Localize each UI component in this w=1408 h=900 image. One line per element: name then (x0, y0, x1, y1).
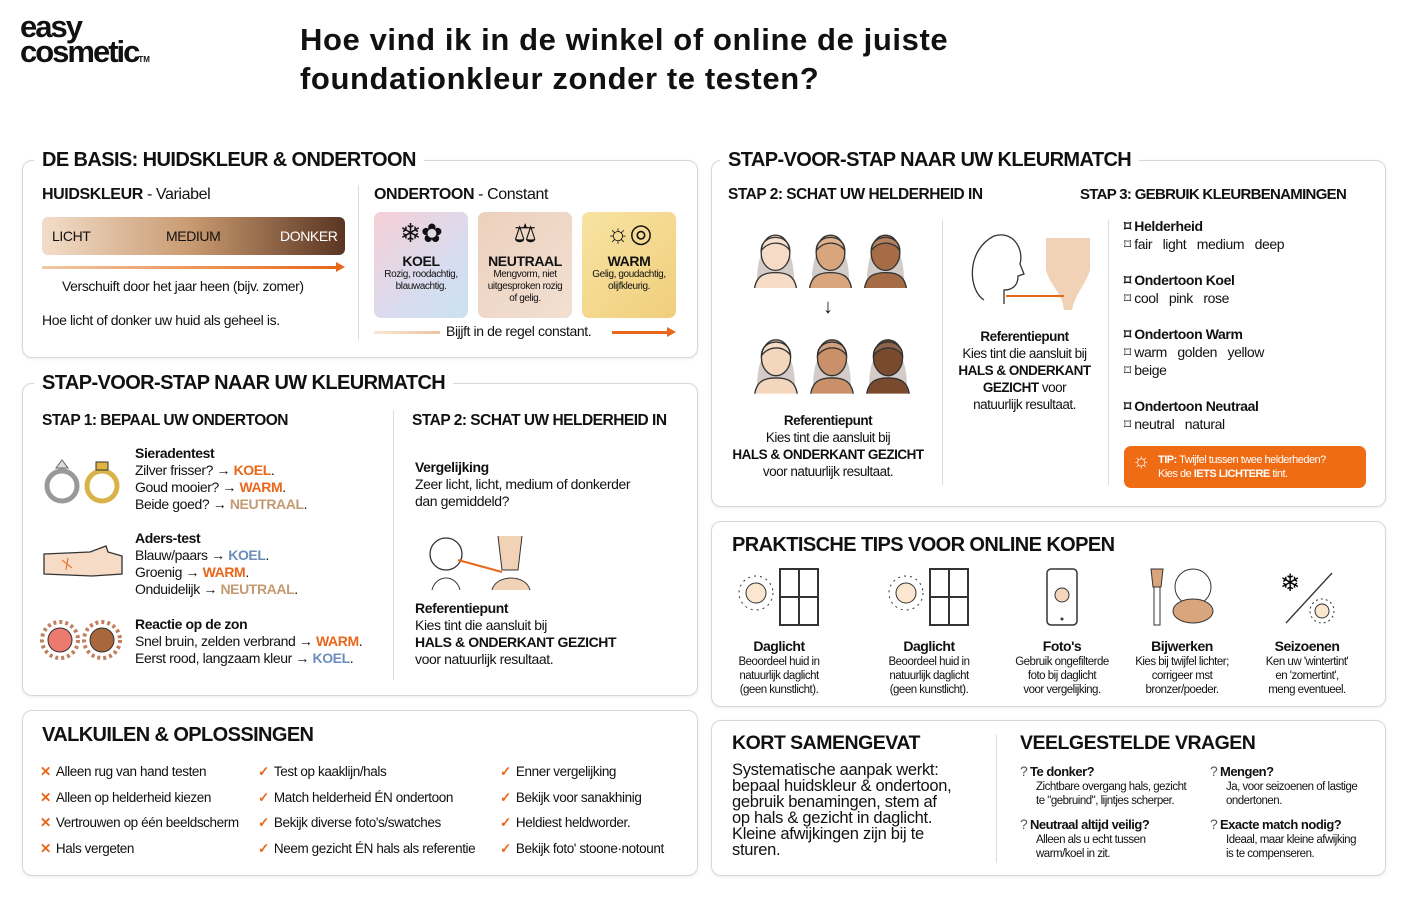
faces top row (754, 234, 907, 288)
icon: arm (43, 545, 123, 577)
tip daglicht 2: (geen kunstlicht). (890, 684, 968, 696)
faces bottom row (754, 339, 910, 394)
stap 3: ⌑ beige (1124, 362, 1167, 378)
stap 1: STAP 1: BEPAAL UW ONDERTOON (42, 412, 288, 429)
veelgestelde vragen: ? Exacte match nodig? (1210, 816, 1341, 832)
card warm: Gelig, goudachtig, (592, 269, 666, 280)
tip fotos: voor vergelijking. (1023, 684, 1101, 696)
tip callout: Kies de IETS LICHTERE tint. (1158, 468, 1288, 480)
heading: praktische tips: PRAKTISCHE TIPS VOOR ONLINE KOPEN (732, 534, 1114, 556)
card warm: WARM (608, 253, 650, 269)
heading: stap voor stap: STAP-VOOR-STAP NAAR UW KLEURMATCH (42, 372, 445, 394)
profile and neck icon (972, 234, 1090, 310)
kort samengevat: Systematische aanpak werkt: (732, 761, 938, 779)
veelgestelde vragen: Zichtbare overgang hals, gezicht (1036, 781, 1186, 793)
card neutraal (478, 212, 572, 318)
icon: sun reactions (40, 620, 122, 660)
tip daglicht 2 (888, 568, 970, 696)
stap 1: Groenig → WARM. (135, 564, 249, 580)
tip fotos: Foto's (1043, 638, 1081, 654)
tip seizoenen: ❄ (1280, 569, 1300, 597)
logo (20, 9, 150, 69)
stap 3: ⌑ Ondertoon Warm (1124, 326, 1242, 342)
kort samengevat: KORT SAMENGEVAT (732, 732, 920, 754)
huidskleur block (42, 186, 345, 328)
panel: de basis (22, 160, 698, 358)
card warm: ☼◎ (606, 218, 652, 248)
stap 2 left: dan gemiddeld? (415, 493, 509, 509)
stap 1: Snel bruin, zelden verbrand → WARM. (135, 633, 362, 649)
card neutraal: NEUTRAAL (488, 253, 562, 269)
tip callout: ☼ (1132, 450, 1150, 472)
stap 1: Goud mooier? → WARM. (135, 479, 286, 495)
list: valkuilen: ✓ Heldiest heldworder. (500, 815, 630, 830)
stap 2 left: Vergelijking (415, 459, 489, 475)
stap 2 left: STAP 2: SCHAT UW HELDERHEID IN (412, 412, 667, 429)
stap 3: ⌑ neutral natural (1124, 416, 1225, 432)
tip seizoenen: Ken uw 'wintertint' (1266, 656, 1348, 668)
kort samengevat: op hals & gezicht in daglicht. (732, 809, 932, 827)
kort samengevat: bepaal huidskleur & ondertoon, (732, 777, 951, 795)
icon: rings (44, 459, 120, 504)
stap 2 right (728, 186, 1091, 479)
tip seizoenen: en 'zomertint', (1275, 670, 1339, 682)
huidskleur block: Verschuift door het jaar heen (bijv. zomer) (62, 278, 304, 294)
stap 2 right: GEZICHT voor (983, 380, 1066, 395)
tip seizoenen: Seizoenen (1275, 638, 1339, 654)
list: valkuilen: ✕ Hals vergeten (40, 840, 134, 856)
stap 2 right: HALS & ONDERKANT GEZICHT (732, 447, 924, 462)
card warm (582, 212, 676, 318)
stap 1: Beide goed? → NEUTRAAL. (135, 496, 307, 512)
ondertoon block (374, 186, 676, 339)
stap 1: Onduidelijk → NEUTRAAL. (135, 581, 298, 597)
tips row (738, 568, 1348, 696)
stap 2 right: Kies tint die aansluit bij (962, 346, 1087, 361)
stap 2 right: natuurlijk resultaat. (973, 397, 1076, 412)
stap 2 left (412, 412, 667, 667)
tip callout (1124, 446, 1366, 488)
tip daglicht 2: Beoordeel huid in (888, 656, 970, 668)
stap 2 left: voor natuurlijk resultaat. (415, 651, 553, 667)
card neutraal: ⚖ (514, 218, 536, 248)
stap 2 left: Referentiepunt (415, 600, 508, 616)
list: valkuilen: ✓ Bekijk foto' stoone·notount (500, 840, 664, 856)
tip daglicht 1: Beoordeel huid in (738, 656, 820, 668)
list: valkuilen (40, 764, 664, 856)
stap 3: ⌑ warm golden yellow (1124, 344, 1264, 360)
stap 1: Reactie op de zon (135, 616, 247, 632)
panel: stap voor stap rechts (711, 160, 1386, 507)
stap 1: Zilver frisser? → KOEL. (135, 462, 274, 478)
card koel: ❄✿ (400, 218, 442, 248)
stap 1: Sieradentest (135, 445, 214, 461)
title (300, 22, 948, 96)
list: valkuilen: ✕ Alleen rug van hand testen (40, 764, 206, 779)
stap 3: ⌑ Ondertoon Koel (1124, 272, 1234, 288)
panel: praktische tips (711, 521, 1386, 707)
stap 2 right: Referentiepunt (980, 329, 1069, 344)
kort samengevat: sturen. (732, 841, 780, 859)
veelgestelde vragen: te "gebruind", lijntjes scherper. (1036, 795, 1174, 807)
stap 2 left: HALS & ONDERKANT GEZICHT (415, 634, 616, 650)
veelgestelde vragen: Ideaal, maar kleine afwijking (1226, 834, 1356, 846)
card koel (374, 212, 468, 318)
tip bijwerken: corrigeer mst (1152, 670, 1212, 682)
stap 2 right: STAP 2: SCHAT UW HELDERHEID IN (728, 186, 983, 203)
list: valkuilen: ✕ Alleen op helderheid kiezen (40, 790, 211, 804)
tip bijwerken: Bijwerken (1151, 638, 1213, 654)
card koel: Rozig, roodachtig, (384, 269, 458, 280)
card neutraal: Mengvorm, niet (493, 269, 557, 280)
logo: cosmeticTM (20, 34, 150, 69)
tip daglicht 1: natuurlijk daglicht (739, 670, 819, 682)
tip bijwerken: bronzer/poeder. (1145, 684, 1219, 696)
stap 2 right: HALS & ONDERKANT (958, 363, 1091, 378)
kort samengevat: Kleine afwijkingen zijn bij te (732, 825, 924, 843)
card koel: blauwachtig. (396, 281, 446, 292)
stap 3 (1080, 186, 1366, 488)
stap 3: ⌑ Helderheid (1124, 218, 1203, 234)
veelgestelde vragen: ? Neutraal altijd veilig? (1020, 816, 1149, 832)
tip fotos: foto bij daglicht (1028, 670, 1096, 682)
stap 3: STAP 3: GEBRUIK KLEURBENAMINGEN (1080, 186, 1346, 203)
card neutraal: uitgesproken rozig (488, 281, 562, 292)
stap 3: ⌑ fair light medium deep (1124, 236, 1284, 252)
tip seizoenen: meng eventueel. (1268, 684, 1346, 696)
heading: de basis: DE BASIS: HUIDSKLEUR & ONDERTOON (42, 149, 416, 171)
stap 1: Aders-test (135, 530, 200, 546)
icon: face and neck (429, 536, 530, 590)
gradient bar: MEDIUM (166, 228, 220, 244)
stap 2 right: Kies tint die aansluit bij (766, 430, 890, 445)
tip daglicht 2: natuurlijk daglicht (889, 670, 969, 682)
list: valkuilen: ✓ Enner vergelijking (500, 764, 616, 779)
stap 2 left: Kies tint die aansluit bij (415, 617, 547, 633)
tip daglicht 1: (geen kunstlicht). (740, 684, 818, 696)
gradient bar: LICHT (52, 228, 90, 244)
ondertoon block: ONDERTOON - Constant (374, 186, 548, 203)
tip daglicht 2: Daglicht (903, 638, 955, 654)
veelgestelde vragen: ? Te donker? (1020, 763, 1094, 779)
stap 1 (40, 412, 362, 666)
veelgestelde vragen: VEELGESTELDE VRAGEN (1020, 732, 1255, 754)
veelgestelde vragen: warm/koel in zit. (1036, 848, 1110, 860)
stap 2 right: Referentiepunt (784, 413, 872, 428)
panel: stap voor stap links (22, 383, 698, 696)
ondertoon block: Bijjft in de regel constant. (446, 323, 591, 339)
panel: valkuilen (22, 710, 698, 876)
veelgestelde vragen: ? Mengen? (1210, 763, 1274, 779)
veelgestelde vragen: ondertonen. (1226, 795, 1282, 807)
title: foundationkleur zonder te testen? (300, 61, 819, 96)
kort samengevat: gebruik benamingen, stem af (732, 793, 937, 811)
stap 2 right: voor natuurlijk resultaat. (763, 464, 893, 479)
huidskleur block: HUIDSKLEUR - Variabel (42, 186, 210, 203)
gradient bar: DONKER (280, 228, 338, 244)
gradient bar (42, 217, 345, 255)
tip daglicht 1: Daglicht (753, 638, 805, 654)
tip fotos (1015, 568, 1109, 696)
tip bijwerken (1135, 568, 1229, 696)
arrow (42, 266, 338, 269)
tip seizoenen (1266, 569, 1348, 696)
card koel: KOEL (402, 253, 440, 269)
list: valkuilen: ✓ Neem gezicht ÉN hals als referentie (258, 840, 475, 856)
list: valkuilen: ✓ Match helderheid ÉN ondertoon (258, 790, 453, 804)
panel: samenvatting en vragen (711, 720, 1386, 876)
heading: valkuilen: VALKUILEN & OPLOSSINGEN (42, 724, 313, 746)
list: valkuilen: ✓ Test op kaaklijn/hals (258, 764, 386, 779)
stap 3: ⌑ Ondertoon Neutraal (1124, 398, 1259, 414)
kort samengevat (732, 732, 951, 859)
logo: easy (20, 9, 81, 44)
list: valkuilen: ✓ Bekijk voor sanakhinig (500, 790, 641, 804)
stap 1: Blauw/paars → KOEL. (135, 547, 269, 563)
heading: stap voor stap rechts: STAP-VOOR-STAP NAAR UW KLEURMATCH (728, 149, 1131, 171)
veelgestelde vragen (1020, 732, 1358, 860)
card warm: olijfkleurig. (608, 281, 650, 292)
tip daglicht 1 (738, 568, 820, 696)
title: Hoe vind ik in de winkel of online de juiste (300, 22, 948, 57)
stap 2 left: Zeer licht, licht, medium of donkerder (415, 476, 630, 492)
tip fotos: Gebruik ongefilterde (1015, 656, 1109, 668)
huidskleur block: Hoe licht of donker uw huid als geheel is. (42, 312, 280, 328)
stap 3: ⌑ cool pink rose (1124, 290, 1229, 306)
tip callout: TIP: Twijfel tussen twee helderheden? (1158, 454, 1326, 466)
veelgestelde vragen: is te compenseren. (1226, 848, 1314, 860)
arrow down: ↓ (823, 296, 833, 318)
veelgestelde vragen: Ja, voor seizoenen of lastige (1226, 781, 1357, 793)
stap 1: Eerst rood, langzaam kleur → KOEL. (135, 650, 353, 666)
list: valkuilen: ✓ Bekijk diverse foto's/swatches (258, 815, 441, 830)
veelgestelde vragen: Alleen als u echt tussen (1036, 834, 1145, 846)
tip bijwerken: Kies bij twijfel lichter; (1135, 656, 1229, 668)
list: valkuilen: ✕ Vertrouwen op één beeldscherm (40, 815, 239, 830)
card neutraal: of gelig. (509, 293, 541, 304)
